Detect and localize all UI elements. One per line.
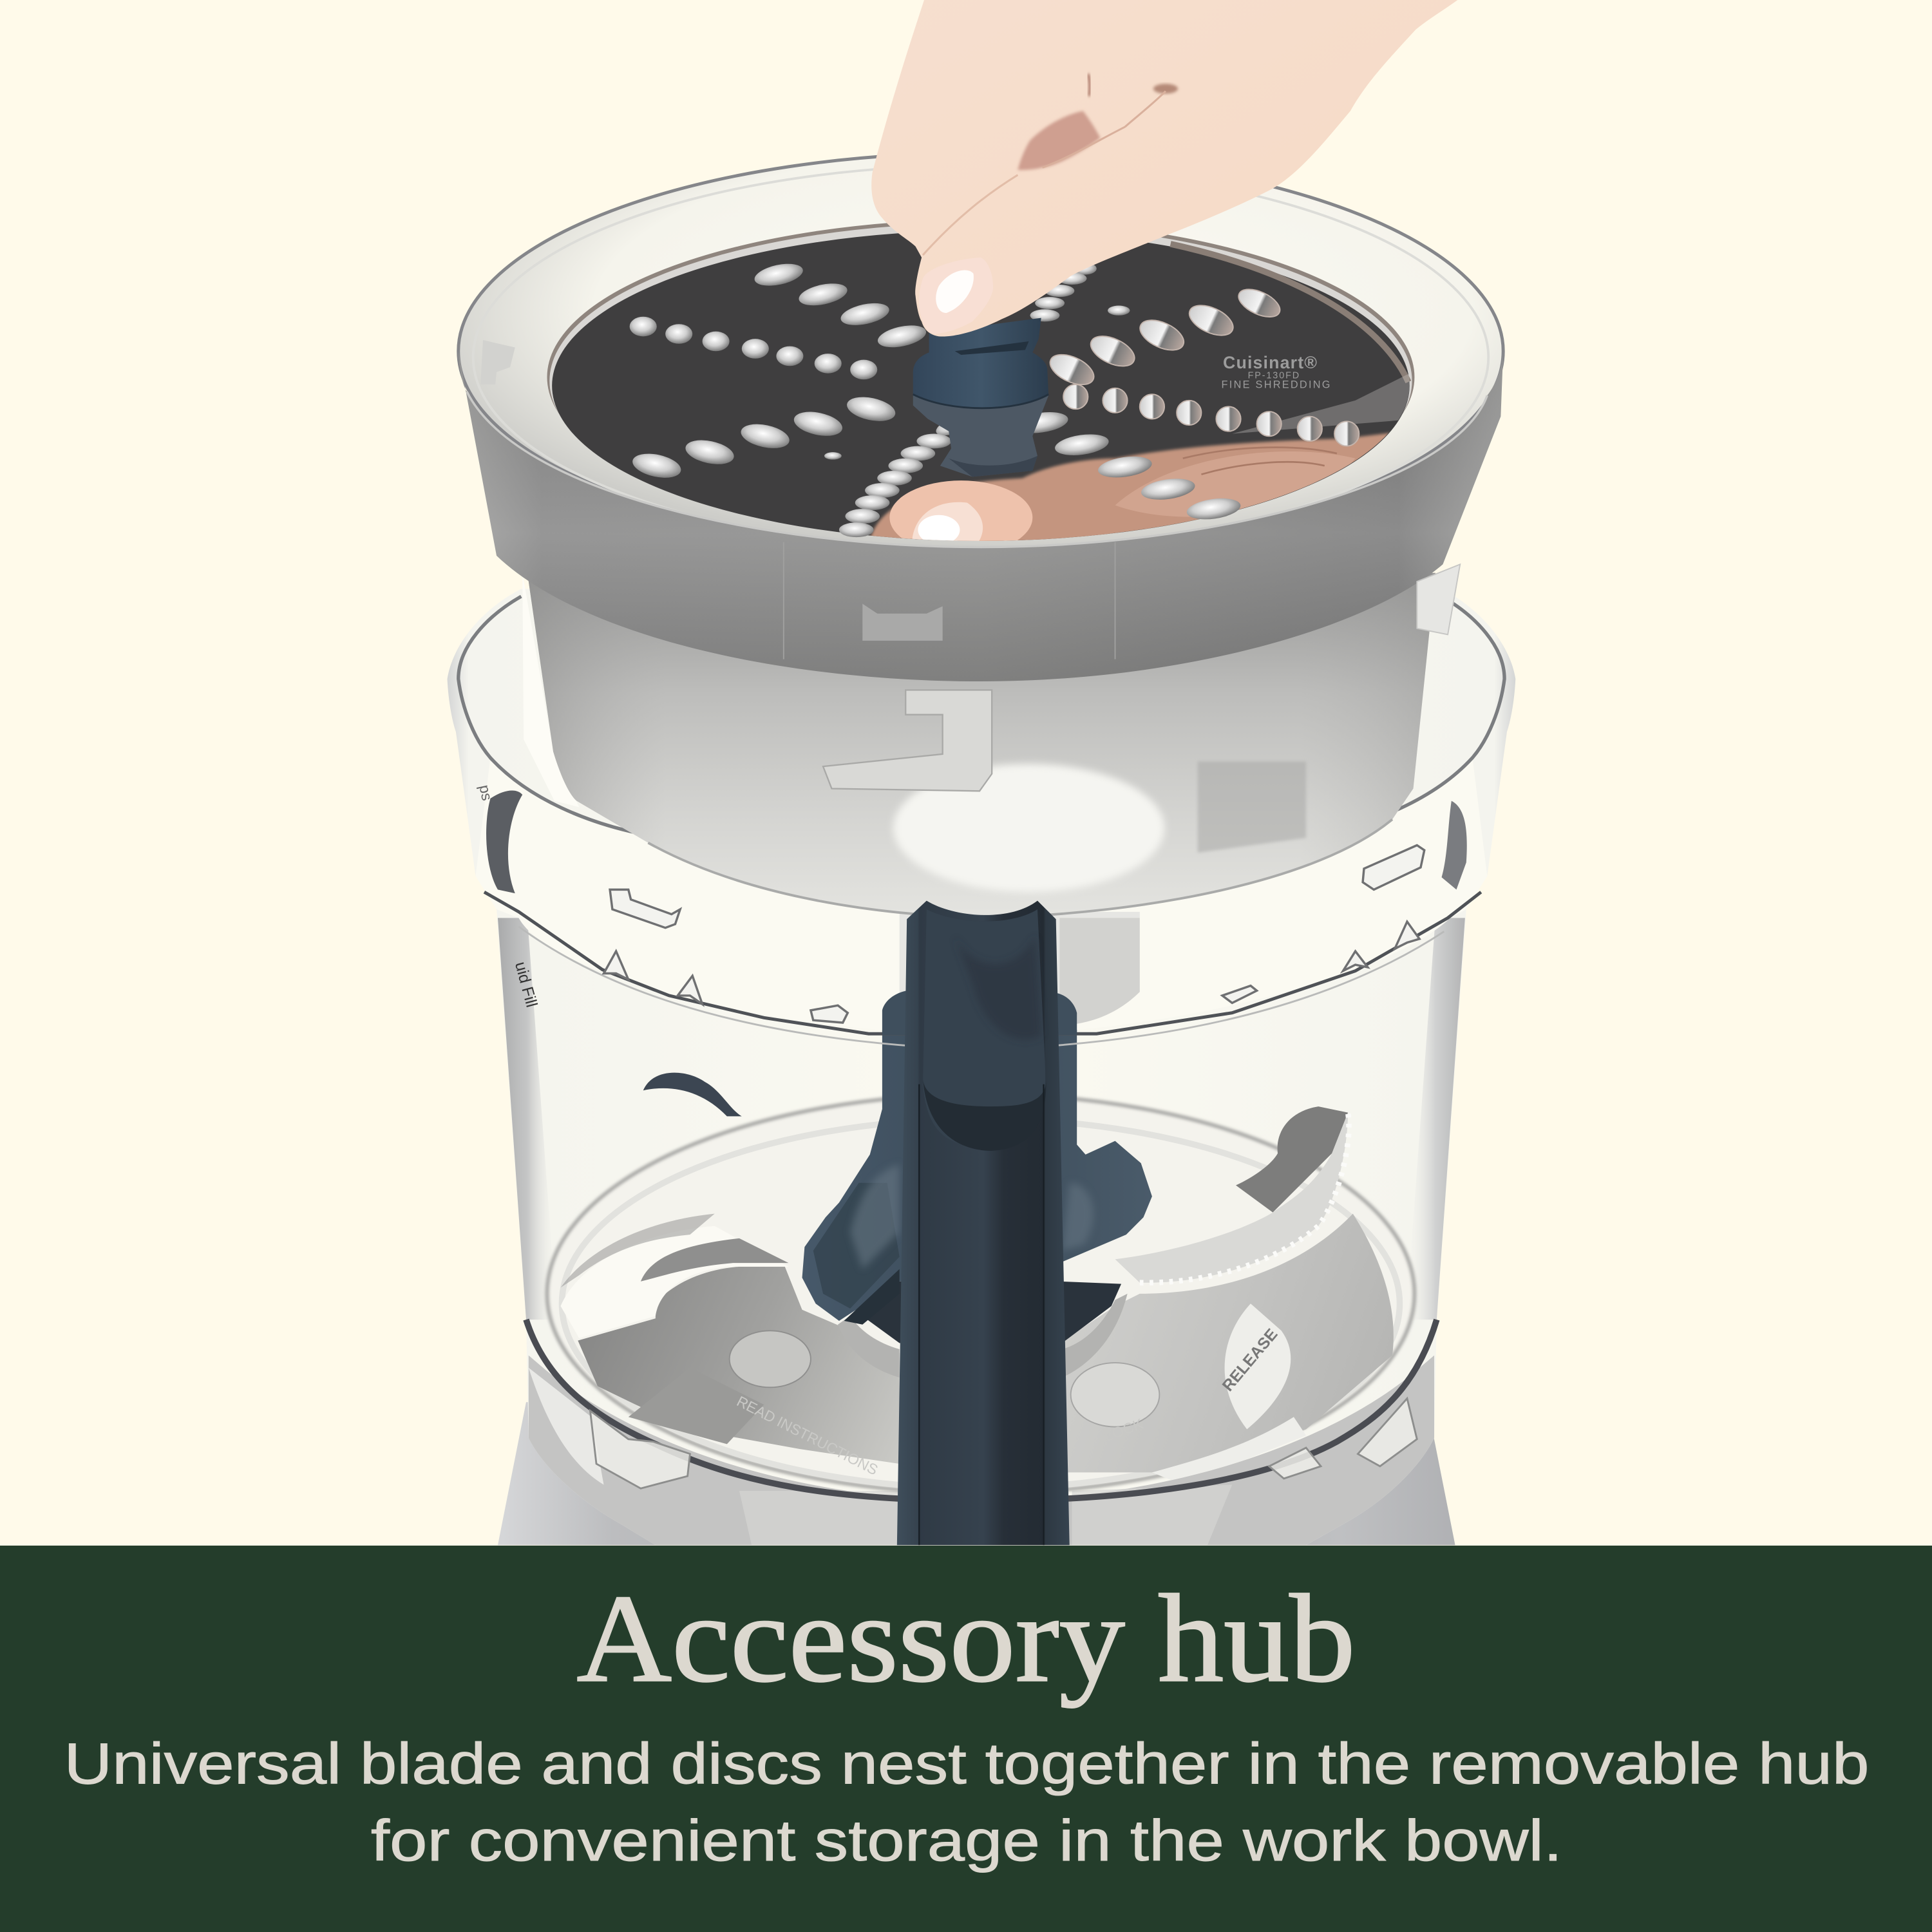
hub ring back	[459, 153, 1503, 549]
left rim dark reflection	[486, 790, 522, 893]
grater holes	[630, 260, 1242, 537]
storage hub	[459, 153, 1504, 1035]
right floor	[1059, 1214, 1394, 1472]
hand holding the disc knob	[871, 0, 1457, 337]
reflection on back wall	[643, 1073, 742, 1116]
bowl floor markings	[734, 1325, 1282, 1479]
lower bowl clips	[590, 1399, 1417, 1488]
bright grater holes	[1046, 284, 1359, 446]
floor rim	[547, 1094, 1414, 1493]
work bowl	[448, 589, 1515, 1545]
hand reflection in disc	[869, 374, 1410, 541]
bowl rim front line	[459, 596, 1504, 887]
crevice between fingers	[1018, 111, 1101, 170]
right serrated blade	[1115, 1106, 1349, 1283]
disc bronze rim	[1171, 244, 1408, 382]
description: Universal blade and discs nest together in the removable hub	[64, 1732, 1869, 1796]
hub stem	[900, 912, 1140, 1025]
shredding disc	[547, 220, 1417, 554]
disc engraving: FP-130FD	[1248, 370, 1300, 381]
rim capacity marking: ps	[476, 783, 496, 802]
ledge teeth line	[484, 892, 1481, 1034]
bowl floor markings: RELEASE	[1219, 1325, 1282, 1395]
disc knob	[913, 318, 1048, 477]
hub bottom rim	[648, 819, 1392, 918]
floor disc mark	[730, 1331, 811, 1387]
hub latch	[823, 690, 992, 791]
rim ledge area	[476, 758, 1487, 1035]
lower wall tone	[529, 1356, 1434, 1545]
hub grey front band	[459, 351, 1503, 681]
bowl floor markings: READ INSTRUCTIONS	[734, 1392, 881, 1479]
bowl body	[448, 589, 1515, 1545]
disc engraving	[1222, 353, 1332, 391]
liquid fill marking: uid Fill	[511, 960, 541, 1009]
left wall stripe	[498, 918, 557, 1320]
disc engraving: FINE SHREDDING	[1222, 379, 1332, 391]
hub floor dome	[893, 764, 1164, 892]
bowl floor	[547, 1094, 1414, 1493]
hub reflection strip	[522, 573, 579, 807]
dark base seal	[526, 1320, 1437, 1501]
left floor and blade	[578, 1267, 900, 1464]
hub body	[527, 573, 1435, 918]
food processor base	[498, 1402, 1455, 1545]
ring inner tab	[480, 340, 515, 384]
right rim dark reflection	[1442, 801, 1467, 889]
finger creases	[1088, 74, 1090, 96]
blade column behind ledge	[882, 990, 1077, 1035]
blade assembly hub	[802, 992, 1152, 1321]
heading: Accessory hub	[576, 1569, 1356, 1709]
band notch	[862, 604, 943, 641]
description: for convenient storage in the work bowl.	[371, 1809, 1562, 1873]
hub window reflection	[1198, 761, 1306, 853]
bowl floor markings: LOCK	[1102, 1415, 1146, 1444]
work bowl handle	[897, 901, 1070, 1545]
caption band	[0, 1546, 1932, 1932]
rim tabs	[604, 845, 1425, 1023]
disc engraving: Cuisinart®	[1223, 353, 1318, 372]
description	[64, 1732, 1869, 1873]
right wall stripe	[1406, 918, 1465, 1320]
fingernail	[919, 258, 993, 334]
side tab	[1417, 564, 1460, 634]
blade assembly shaft	[859, 1282, 1121, 1343]
shaft collar	[838, 1294, 1128, 1378]
